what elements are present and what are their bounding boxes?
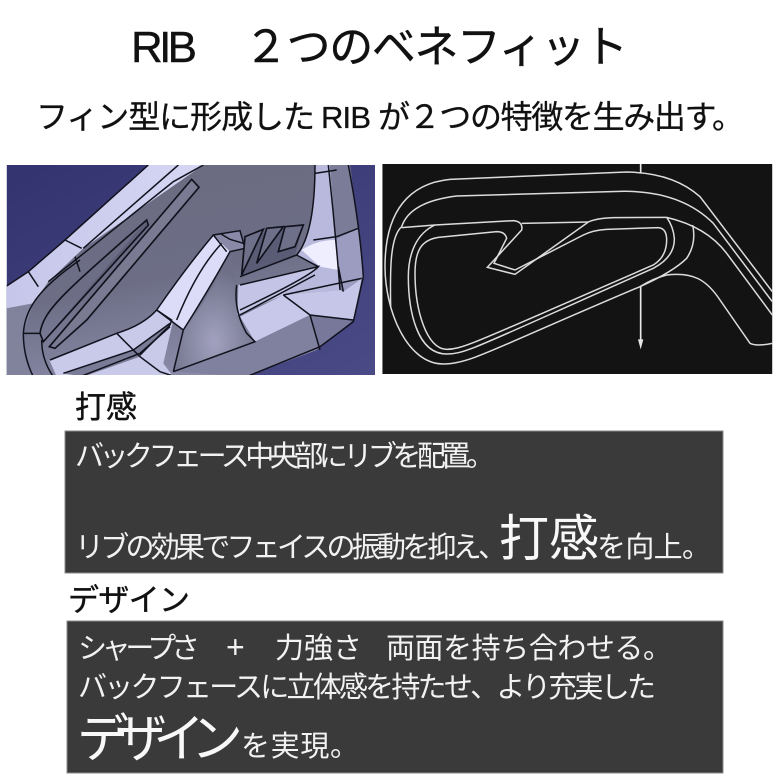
outer contour (385, 172, 772, 364)
text: line 1: シャープさ (78, 633, 200, 665)
text: line 1 (78, 629, 672, 665)
title: RIB (131, 23, 197, 72)
text: line 2: バックフェースに立体感を持たせ、より充実した (78, 671, 656, 704)
face ledge (402, 217, 667, 274)
text: line 1: + (226, 629, 245, 665)
heading: 打感: 打感 (75, 390, 137, 425)
panel: wireframe cross-section of iron (382, 164, 772, 374)
heading: デザイン: デザイン (68, 583, 190, 618)
text: emphasis デザイン: デザイン (77, 711, 243, 769)
slots (240, 229, 300, 276)
arrow: section line (638, 164, 643, 349)
hosel and right surfaces (283, 165, 340, 295)
text: line 1: 両面を持ち合わせる。 (386, 632, 672, 665)
subtitle: RIB (321, 100, 371, 135)
panel: デザイン text box (67, 621, 723, 773)
rib inner (408, 217, 674, 354)
text: line 2 end: を向上。 (597, 531, 711, 564)
text: emphasis 打感: 打感 (499, 511, 599, 567)
centre surface under fin (174, 286, 254, 370)
title: ２つのベネフィット (244, 23, 628, 72)
sole left band (7, 303, 33, 377)
text: line 1: バックフェース中央部にリブを配置。 (75, 440, 495, 473)
subtitle: フィン型に形成した (36, 99, 315, 135)
panel: 打感 text box (65, 431, 723, 573)
top line inner (390, 191, 772, 307)
fin rib (158, 236, 230, 329)
subtitle (36, 99, 744, 135)
text: line 2: リブの効果でフェイスの振動を抑え、 (75, 531, 507, 564)
top line surface (7, 165, 203, 308)
panel: 3D CAD render of rib (7, 165, 375, 377)
subtitle: が２つの特徴を生み出す。 (378, 99, 744, 135)
club body silhouette (7, 165, 363, 377)
text: line 3 end: を実現。 (241, 730, 359, 763)
text: line 1: 力強さ (275, 632, 362, 665)
